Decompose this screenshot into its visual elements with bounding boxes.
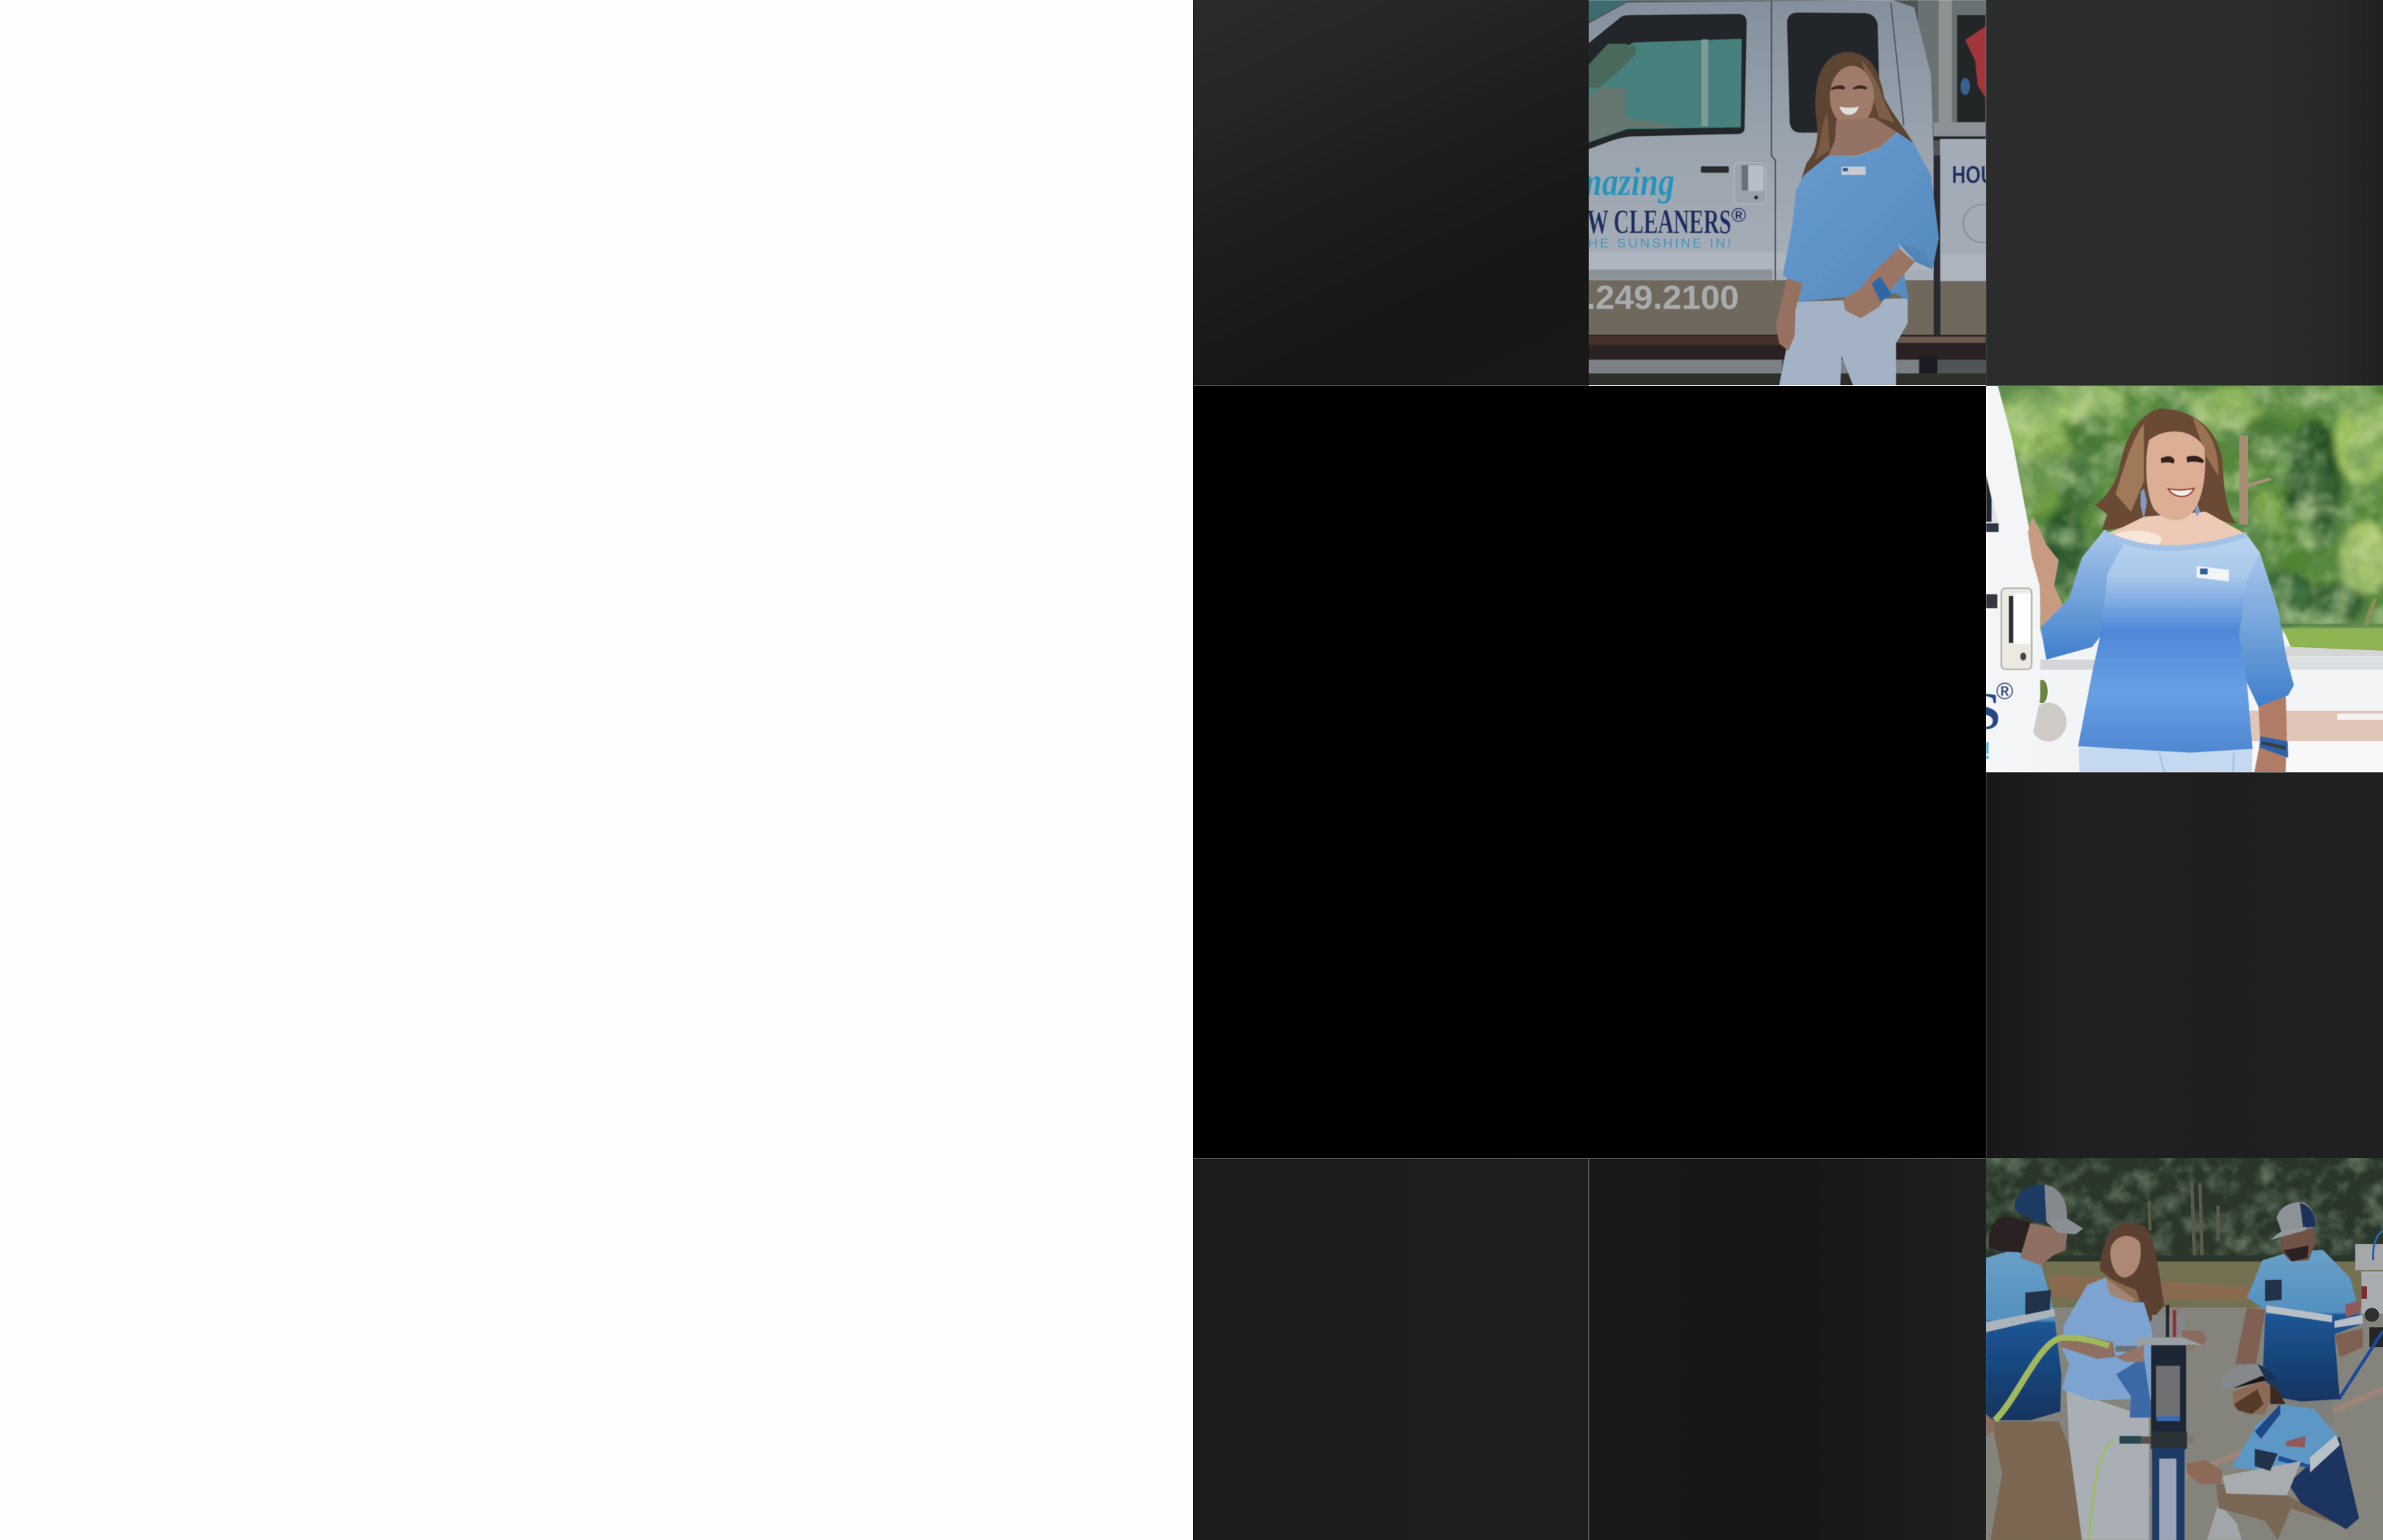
- white van door: [1984, 384, 2040, 773]
- truck lettering: HE SUNSHINE IN!: [1589, 236, 1731, 251]
- photo: woman in front of service truck: [1589, 0, 1986, 385]
- water filter column: [2115, 1305, 2207, 1540]
- truck lettering: [1576, 159, 1995, 316]
- photo: team with water filter system: [1986, 1158, 2383, 1540]
- pavement background: [1979, 379, 2383, 787]
- woman standing: [1776, 52, 1939, 385]
- truck background and equipment: [1586, 0, 1991, 386]
- foliage light mottling: [1979, 379, 2383, 624]
- white left panel: [0, 0, 1193, 1540]
- tree line mottling: [1979, 1151, 2383, 1255]
- arm and lime green hose: [1995, 1336, 2138, 1540]
- kneeling man: [2186, 1364, 2359, 1540]
- tree trunk: [2239, 435, 2377, 626]
- panel: dark tile top right: [1986, 0, 2383, 386]
- panel: dark tile bottom middle: [1589, 1158, 1986, 1540]
- grass strip: [2283, 629, 2383, 651]
- standing man right: [2235, 1202, 2363, 1424]
- panel: dark tile top left: [1193, 0, 1589, 386]
- truck lettering: .249.2100: [1589, 280, 1739, 316]
- truck lettering: W CLEANERS: [1589, 203, 1731, 241]
- rocks and shrub: [2031, 680, 2067, 742]
- panel: dark tile bottom left: [1193, 1158, 1589, 1540]
- rear cab window: [1787, 12, 1880, 133]
- door handle and keypad: [1701, 163, 1766, 203]
- panel: dark tile middle right: [1986, 772, 2383, 1158]
- truck at right edge: [2355, 1230, 2383, 1347]
- front cab window: [1586, 14, 1747, 150]
- foliage background: [1979, 379, 2383, 630]
- person left with cap: [1986, 1184, 2090, 1540]
- van logo lettering: ®: [1996, 678, 2013, 705]
- panel: black centre block: [1193, 386, 1986, 1158]
- tree trunks: [2149, 1181, 2218, 1255]
- photo: woman beside white van, bright: [1986, 386, 2383, 772]
- truck body: [1586, 0, 2002, 386]
- van logo lettering: [1971, 678, 2013, 764]
- woman smiling: [2028, 409, 2294, 773]
- blue pole: [2339, 1331, 2383, 1399]
- foliage dark mottling: [1979, 379, 2383, 628]
- ground and field: [1979, 1151, 2383, 1540]
- tree line: [1979, 1151, 2383, 1262]
- woman in centre: [2062, 1222, 2164, 1540]
- truck lettering: ®: [1731, 205, 1746, 227]
